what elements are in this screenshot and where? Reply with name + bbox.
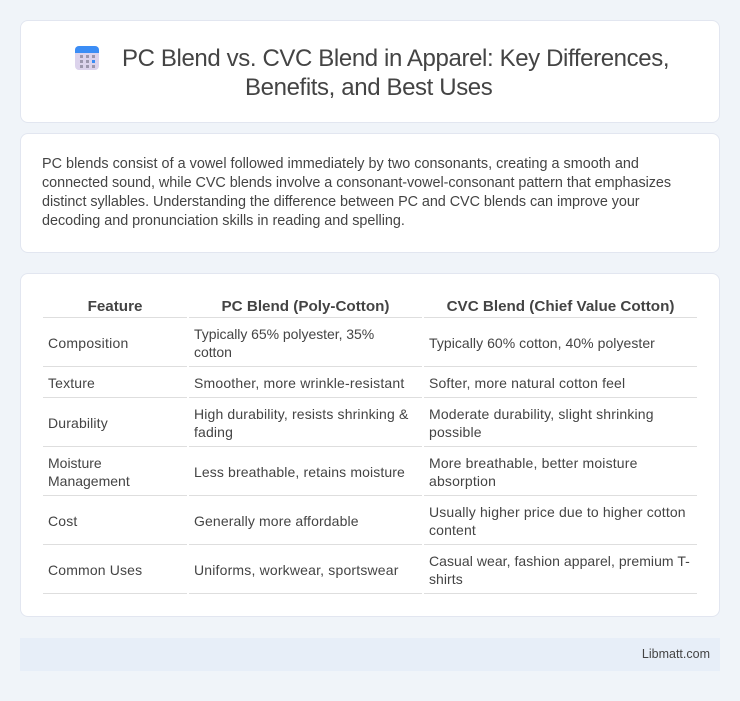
cell [429, 406, 654, 440]
header: PC Blend: PC Blend (Poly-Cotton) [222, 298, 389, 315]
header panel [20, 20, 720, 123]
cell: Casual wear, fashion apparel, premium T- [429, 553, 690, 569]
row: Common Uses: Common Uses [48, 562, 142, 578]
cell: Generally more affordable [194, 513, 359, 529]
intro text: PC blends consist of a vowel followed immediately by two consonants, creating a smooth and [42, 156, 639, 172]
row: Moisture Management: Moisture [48, 455, 102, 471]
cell [429, 455, 638, 489]
cell: shirts [429, 571, 463, 587]
cell [429, 553, 690, 587]
cell: possible [429, 424, 482, 440]
cell: High durability, resists shrinking & [194, 406, 408, 422]
cell: Typically 65% polyester, 35% [194, 326, 374, 342]
cell [194, 406, 408, 440]
cell: Typically 60% cotton, 40% polyester [429, 335, 655, 351]
row: Moisture Management [48, 455, 130, 489]
header: CVC Blend: CVC Blend (Chief Value Cotton) [447, 298, 674, 315]
cell: fading [194, 424, 233, 440]
intro text: decoding and pronunciation skills in reading and spelling. [42, 213, 405, 229]
row: Texture: Texture [48, 375, 95, 391]
row: Composition: Composition [48, 335, 129, 351]
cell: Less breathable, retains moisture [194, 464, 405, 480]
comparison table [43, 298, 697, 594]
cell: absorption [429, 473, 496, 489]
intro panel [20, 133, 720, 253]
row: Moisture Management: Management [48, 473, 130, 489]
cell: Smoother, more wrinkle-resistant [194, 375, 404, 391]
cell [194, 326, 374, 360]
cell: content [429, 522, 476, 538]
cell: cotton [194, 344, 232, 360]
title: PC Blend vs. CVC Blend in Apparel: Key Differences, [122, 45, 669, 72]
cell: Softer, more natural cotton feel [429, 375, 625, 391]
cell [429, 504, 686, 538]
comparison table panel [20, 273, 720, 617]
row: Cost: Cost [48, 513, 77, 529]
intro text: connected sound, while CVC blends involve a consonant-vowel-consonant pattern that emphasizes [42, 175, 671, 191]
row: Durability: Durability [48, 415, 108, 431]
intro text [42, 156, 671, 229]
cell: Uniforms, workwear, sportswear [194, 562, 399, 578]
title: Benefits, and Best Uses [245, 74, 492, 101]
cell: Usually higher price due to higher cotton [429, 504, 686, 520]
intro text: distinct syllables. Understanding the difference between PC and CVC blends can improve your [42, 194, 640, 210]
cell: Moderate durability, slight shrinking [429, 406, 654, 422]
footer text: Libmatt.com [642, 647, 710, 661]
title [122, 45, 669, 101]
icon: calendar [75, 46, 99, 70]
cell: More breathable, better moisture [429, 455, 638, 471]
footer bar [20, 638, 720, 671]
header: Feature: Feature [88, 298, 142, 315]
